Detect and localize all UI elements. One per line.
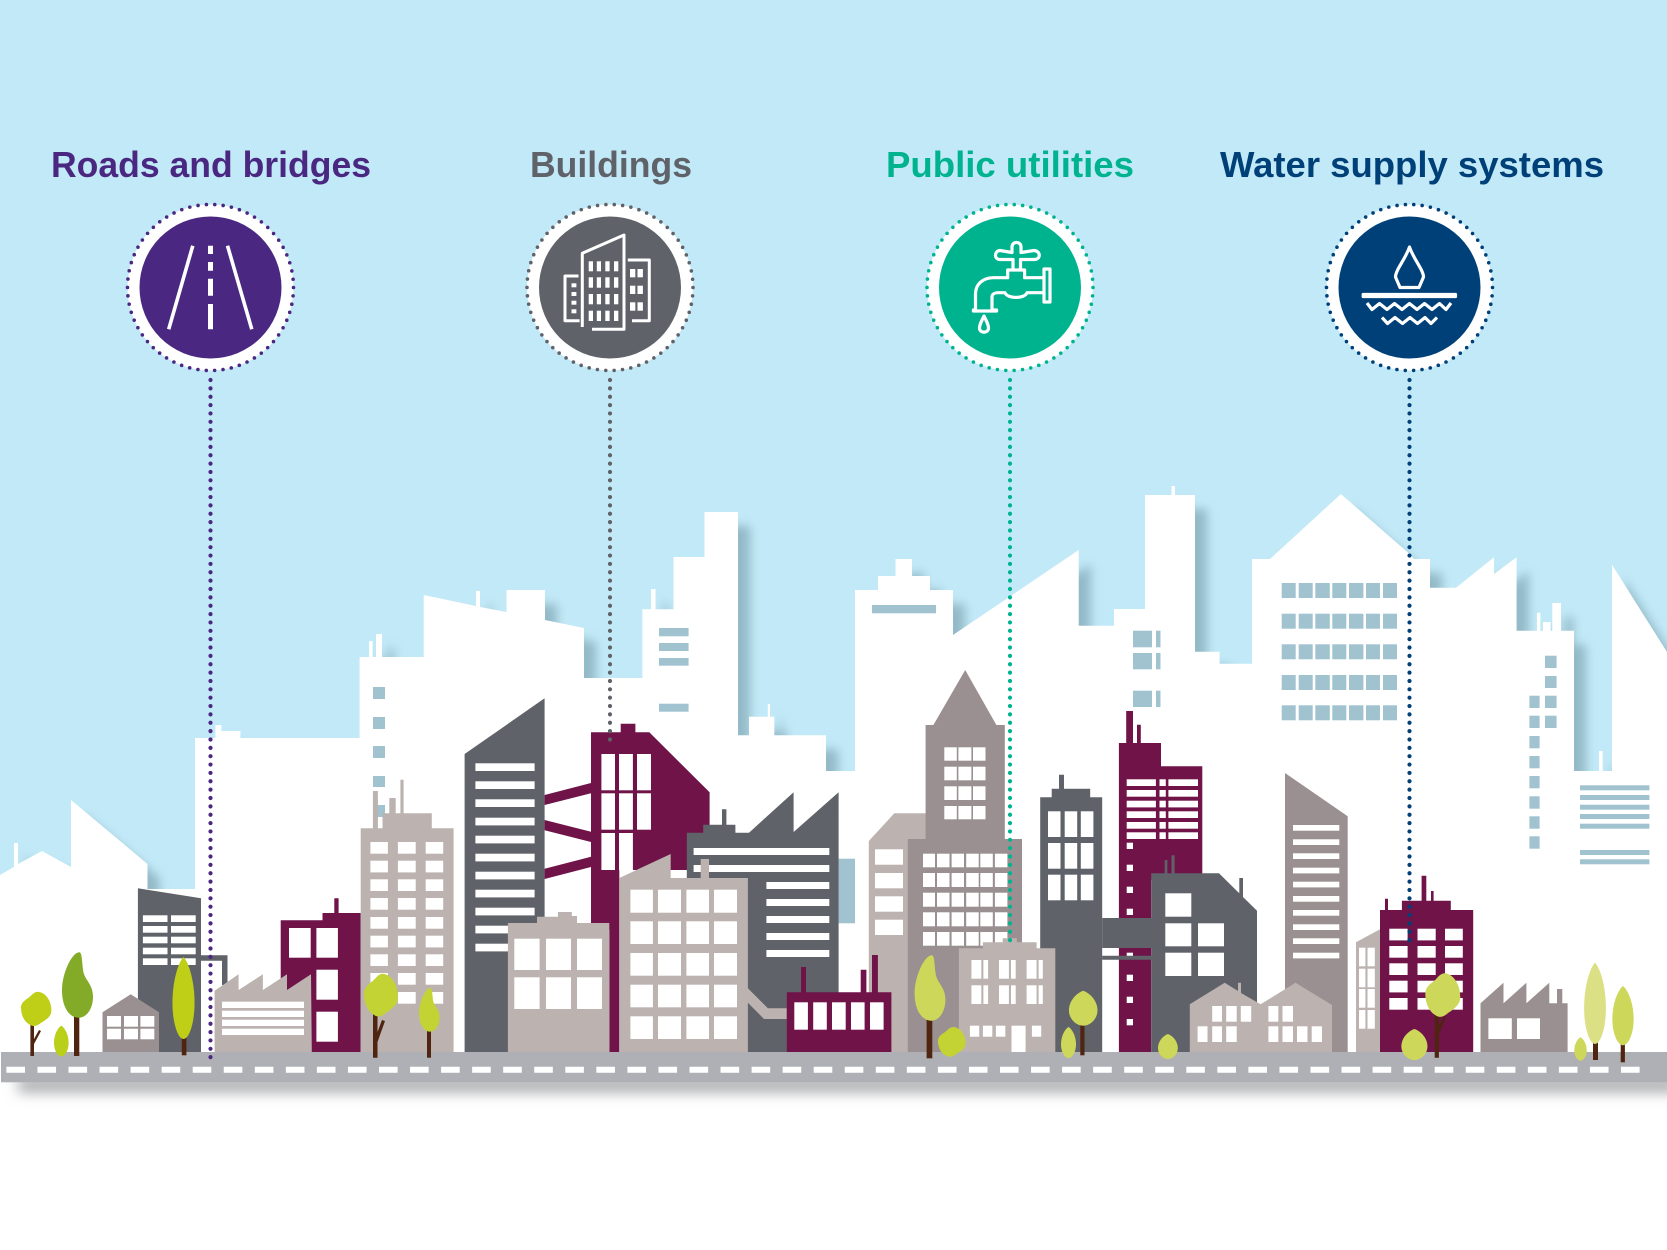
building: left factory <box>215 974 312 1052</box>
white skyline silhouette <box>0 486 1667 1250</box>
heading: roads and bridges: Roads and bridges <box>51 144 371 185</box>
building: grey stepped tower <box>1040 775 1102 1052</box>
building: taupe tower <box>361 780 454 1052</box>
building: spire tower <box>908 670 1022 1052</box>
tree 4 <box>364 974 398 1058</box>
shrub 1 <box>54 1026 69 1056</box>
badge: utilities <box>927 204 1093 370</box>
tree 6 <box>915 955 945 1058</box>
building: front taupe block centre <box>619 854 787 1052</box>
badge: buildings <box>527 204 693 370</box>
heading: public utilities: Public utilities <box>886 144 1134 185</box>
trees <box>21 952 1634 1062</box>
building: front taupe block with door <box>959 938 1055 1052</box>
icon: road <box>169 246 252 329</box>
tree 7 <box>1069 991 1098 1055</box>
road <box>1 1052 1667 1082</box>
tree 9 <box>1584 963 1606 1060</box>
tree 1 <box>21 992 51 1056</box>
building: right factory <box>1480 983 1568 1052</box>
connector: water <box>1407 380 1412 948</box>
tree 2 <box>62 952 93 1056</box>
heading: water supply systems: Water supply systems <box>1220 144 1604 185</box>
connector: utilities <box>1008 380 1012 948</box>
connector: roads <box>208 380 213 1062</box>
sky bridges <box>545 783 591 879</box>
shrub 5 <box>1401 1029 1427 1060</box>
tree 8 <box>1425 973 1460 1058</box>
road shadow <box>18 1078 1667 1092</box>
building: light taupe annex <box>869 813 930 1052</box>
heading: buildings: Buildings <box>530 144 692 185</box>
tree 3 <box>172 957 195 1055</box>
building: grey factory <box>687 792 839 1052</box>
shrub 2 <box>938 1027 966 1057</box>
building: dark taupe tall right <box>1285 773 1348 1052</box>
building: maroon tower <box>591 724 710 1052</box>
building: small house <box>102 994 159 1052</box>
tree 5 <box>419 988 440 1058</box>
building: twin gabled houses <box>1190 983 1332 1052</box>
building: small grey office <box>138 888 228 1052</box>
skyline windows <box>373 583 1649 923</box>
building: narrow light taupe <box>1356 929 1380 1052</box>
building: maroon block <box>281 898 361 1052</box>
connector: buildings <box>608 380 612 741</box>
tree 10 <box>1612 986 1634 1062</box>
shrub 4 <box>1158 1034 1178 1059</box>
badge: water <box>1326 204 1492 370</box>
icon: tap <box>973 242 1050 332</box>
building: grey angled block with bridge <box>1102 855 1257 1052</box>
shrub 6 <box>1574 1037 1587 1061</box>
icon: water drop <box>1363 247 1456 324</box>
building: maroon block right <box>1380 876 1473 1052</box>
building: maroon factory <box>787 955 891 1052</box>
shrub 3 <box>1061 1027 1076 1058</box>
badge: roads <box>128 204 294 370</box>
building: front taupe block left <box>508 912 609 1052</box>
skyline shadow <box>12 500 1667 1250</box>
building: tall maroon tower <box>1119 711 1202 1052</box>
icon: office buildings <box>565 235 649 329</box>
building: tall grey tower <box>465 698 545 1052</box>
